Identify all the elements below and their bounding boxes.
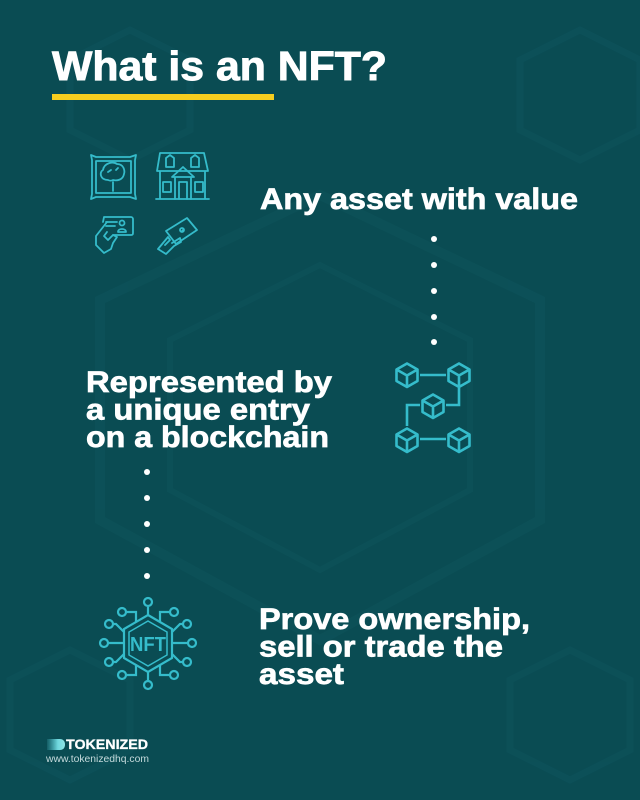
heading: represented by — [86, 366, 332, 454]
title: What is an NFT? — [52, 43, 387, 89]
heading: represented by: on a blockchain — [86, 421, 329, 454]
logo mark — [47, 739, 65, 750]
heading: prove ownership: sell or trade the — [259, 630, 503, 664]
heading: prove ownership — [259, 603, 530, 691]
title underline — [52, 94, 274, 100]
icon: hand holding banknote — [158, 218, 197, 254]
logo wordmark: TOKENIZED — [66, 737, 148, 752]
heading: any asset with value: Any asset with value — [260, 183, 578, 216]
icon: blockchain — [396, 364, 470, 452]
icon: NFT chip: NFT — [130, 634, 166, 656]
icon: NFT chip — [100, 598, 196, 689]
icon: house — [156, 153, 209, 199]
dotted connector: bottom — [144, 469, 150, 579]
logo — [45, 737, 149, 765]
icon: framed tree — [91, 155, 136, 199]
dotted connector: top — [431, 236, 437, 345]
icon: hand holding ID card — [96, 217, 133, 253]
heading: prove ownership: Prove ownership, — [259, 603, 530, 636]
website: www.tokenizedhq.com — [45, 754, 149, 765]
icon group: assets — [91, 153, 209, 254]
heading: represented by: a unique entry — [86, 394, 310, 426]
heading: represented by: Represented by — [86, 366, 332, 399]
heading: prove ownership: asset — [259, 658, 344, 691]
